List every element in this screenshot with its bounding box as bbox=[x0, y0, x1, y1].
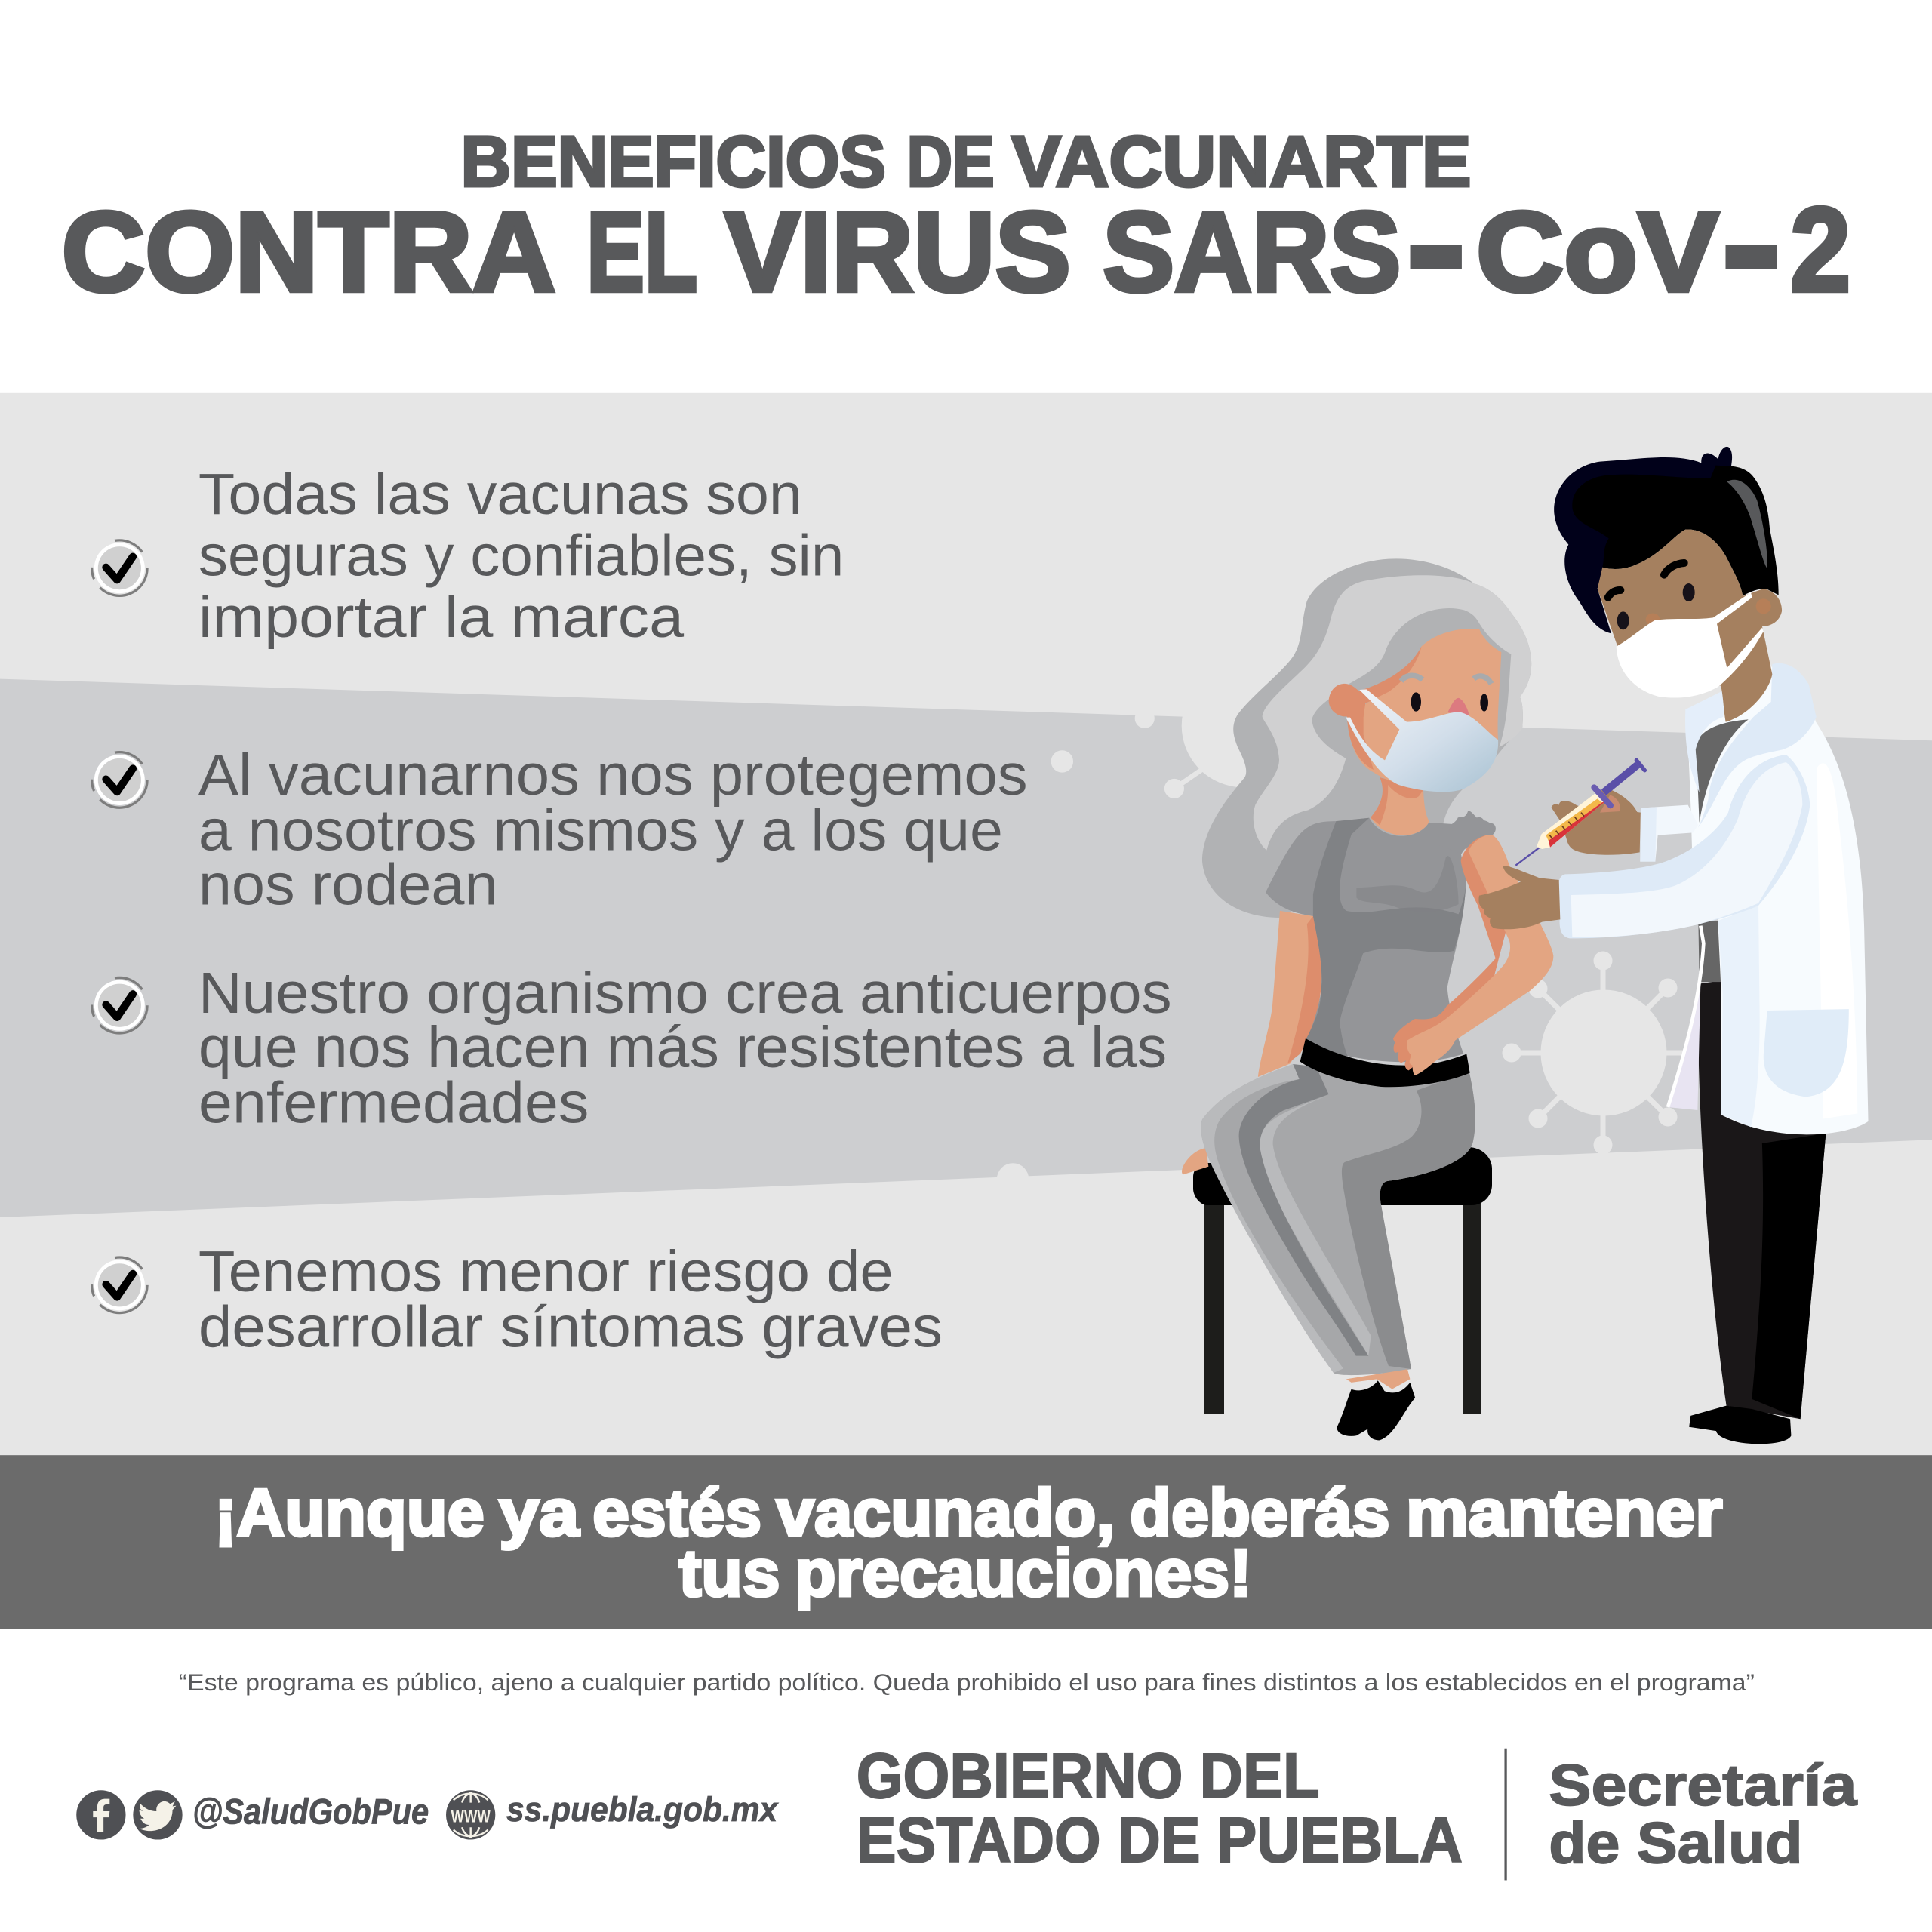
doctor shirt upper bbox=[1696, 719, 1749, 823]
text: benefit 2: Al vacunarnos nos protegemos bbox=[198, 743, 1028, 808]
coat inner highlight bbox=[1817, 763, 1857, 1118]
hair back bbox=[1202, 558, 1531, 918]
shirt bbox=[1266, 818, 1495, 1062]
icon: virus bbox=[1505, 954, 1695, 1152]
text: benefit 2: a nosotros mismos y a los que bbox=[198, 799, 1003, 863]
callout banner: tus bbox=[679, 1535, 780, 1610]
shirt shading bbox=[1306, 818, 1466, 1057]
text: benefit 3: que nos hacen más resistentes a las bbox=[198, 1016, 1167, 1080]
callout banner: deberás bbox=[1130, 1475, 1390, 1549]
icon: www globe: WWW bbox=[451, 1807, 491, 1826]
icon: twitter bbox=[133, 1790, 183, 1840]
text: benefit 2: nos rodean bbox=[198, 853, 498, 917]
list: benefit 2 bbox=[92, 743, 1028, 917]
list: benefit 3 bbox=[92, 961, 1172, 1135]
icon: check 3 bbox=[92, 977, 147, 1033]
text: benefit 3 bbox=[198, 961, 1172, 1135]
sleeve light bbox=[1571, 762, 1802, 937]
upper cuff bbox=[1640, 805, 1698, 862]
foot bbox=[1182, 1148, 1208, 1174]
doctor body bbox=[1688, 665, 1869, 1444]
title: - bbox=[1406, 153, 1466, 332]
figure: patient bbox=[1182, 558, 1553, 1440]
coat details bbox=[1668, 663, 1817, 1127]
icon: facebook bbox=[76, 1790, 126, 1840]
eyes bbox=[1617, 611, 1629, 629]
text: benefit 4 bbox=[198, 1240, 943, 1359]
callout banner: vacunado, bbox=[777, 1475, 1115, 1549]
coat flap bbox=[1668, 983, 1700, 1110]
handle: @SaludGobPue bbox=[192, 1792, 429, 1832]
doctor shirt bbox=[1698, 921, 1721, 982]
text: benefit 1 bbox=[198, 463, 844, 650]
icon: check 1 bbox=[92, 540, 147, 595]
text: benefit 1: seguras y confiables, sin bbox=[198, 524, 844, 588]
social links bbox=[76, 1790, 779, 1840]
text: benefit 3: Nuestro organismo crea anticuerpos bbox=[198, 961, 1172, 1026]
icon: check 2 bbox=[92, 752, 147, 808]
list: benefit 1 bbox=[92, 463, 844, 650]
title bbox=[62, 122, 1850, 332]
callout banner bbox=[0, 1455, 1932, 1629]
icon: www globe bbox=[446, 1790, 495, 1840]
title: - bbox=[1721, 153, 1782, 332]
ankles and shoes bbox=[1337, 1369, 1415, 1440]
collar left bbox=[1685, 689, 1726, 792]
title: CONTRA bbox=[62, 188, 555, 315]
title: EL bbox=[586, 188, 697, 315]
shoulder frill bbox=[1439, 811, 1496, 853]
callout banner: precauciones! bbox=[795, 1535, 1252, 1610]
right arm bbox=[1393, 835, 1509, 1070]
hair light bbox=[1254, 575, 1531, 851]
logo: gobierno: GOBIERNO DEL bbox=[857, 1740, 1320, 1811]
title: VIRUS bbox=[724, 188, 1071, 315]
doctor head bbox=[1554, 447, 1782, 722]
face and neck bbox=[1598, 530, 1782, 722]
patient shirt and arm bbox=[1258, 818, 1495, 1077]
doctor legs bbox=[1698, 980, 1826, 1419]
nose bbox=[1447, 698, 1469, 715]
coat bbox=[1688, 665, 1869, 1134]
stool bbox=[1193, 1147, 1492, 1414]
logo: gobierno: ESTADO DE PUEBLA bbox=[857, 1804, 1463, 1875]
callout banner: mantener bbox=[1406, 1475, 1722, 1549]
logo: secretaria bbox=[1549, 1754, 1858, 1876]
text: benefit 1: Todas las vacunas son bbox=[198, 463, 802, 527]
panel: light background bbox=[0, 393, 1932, 1455]
title: BENEFICIOS bbox=[461, 122, 886, 202]
neck bbox=[1371, 777, 1429, 835]
coat front strip bbox=[1718, 906, 1760, 1127]
title: CoV bbox=[1476, 188, 1719, 315]
ear bbox=[1329, 684, 1366, 717]
patient head and hair bbox=[1202, 558, 1531, 918]
eyes bbox=[1411, 692, 1421, 712]
title: DE bbox=[907, 122, 995, 202]
title: 2 bbox=[1790, 183, 1850, 316]
callout banner: ¡Aunque bbox=[214, 1475, 485, 1549]
syringe bbox=[1515, 760, 1644, 866]
mask bbox=[1346, 689, 1498, 792]
belt bbox=[1300, 1038, 1470, 1087]
upper hand bbox=[1552, 787, 1641, 855]
text: benefit 2 bbox=[198, 743, 1028, 917]
icon: check 4 bbox=[92, 1257, 147, 1313]
hair navy bbox=[1554, 447, 1732, 633]
disclaimer: “Este programa es público, ajeno a cualquier partido político. Queda prohibido el uso para fines distintos a los establecidos en el programa” bbox=[179, 1669, 1755, 1696]
website: ss.puebla.gob.mx bbox=[506, 1790, 779, 1829]
pants bbox=[1201, 835, 1553, 1375]
doctor hands and syringe bbox=[1478, 755, 1810, 938]
hair highlight bbox=[1727, 480, 1767, 568]
left arm bbox=[1258, 911, 1321, 1077]
logo: gobierno bbox=[857, 1740, 1463, 1875]
list: benefit 4 bbox=[92, 1240, 943, 1359]
sleeve base bbox=[1559, 755, 1810, 938]
doctor shoes bbox=[1689, 1406, 1791, 1444]
callout banner: ya bbox=[499, 1475, 580, 1549]
brows bbox=[1608, 563, 1684, 598]
background virus decorations bbox=[997, 664, 1305, 1195]
collar right bbox=[1698, 663, 1817, 828]
title: SARS bbox=[1103, 188, 1401, 315]
panel: diagonal darker band bbox=[0, 679, 1932, 1217]
hair black bbox=[1572, 466, 1779, 596]
brows bbox=[1401, 675, 1491, 684]
logo: secretaria: Secretaría bbox=[1549, 1754, 1858, 1818]
face bbox=[1347, 629, 1501, 791]
logo: secretaria: de Salud bbox=[1549, 1812, 1803, 1876]
text: benefit 1: importar la marca bbox=[198, 586, 684, 650]
lower hand bbox=[1478, 866, 1560, 929]
coat pocket bbox=[1764, 1009, 1849, 1097]
nose bbox=[1646, 614, 1660, 626]
figure: doctor bbox=[1478, 447, 1869, 1444]
callout banner: estés bbox=[592, 1475, 761, 1549]
illustration: vaccination scene bbox=[1182, 447, 1869, 1444]
ear spot bbox=[1756, 598, 1771, 614]
title: VACUNARTE bbox=[1011, 122, 1471, 202]
mask bbox=[1617, 592, 1764, 698]
text: benefit 3: enfermedades bbox=[198, 1071, 589, 1135]
text: benefit 4: Tenemos menor riesgo de bbox=[198, 1240, 894, 1304]
text: benefit 4: desarrollar síntomas graves bbox=[198, 1295, 943, 1359]
